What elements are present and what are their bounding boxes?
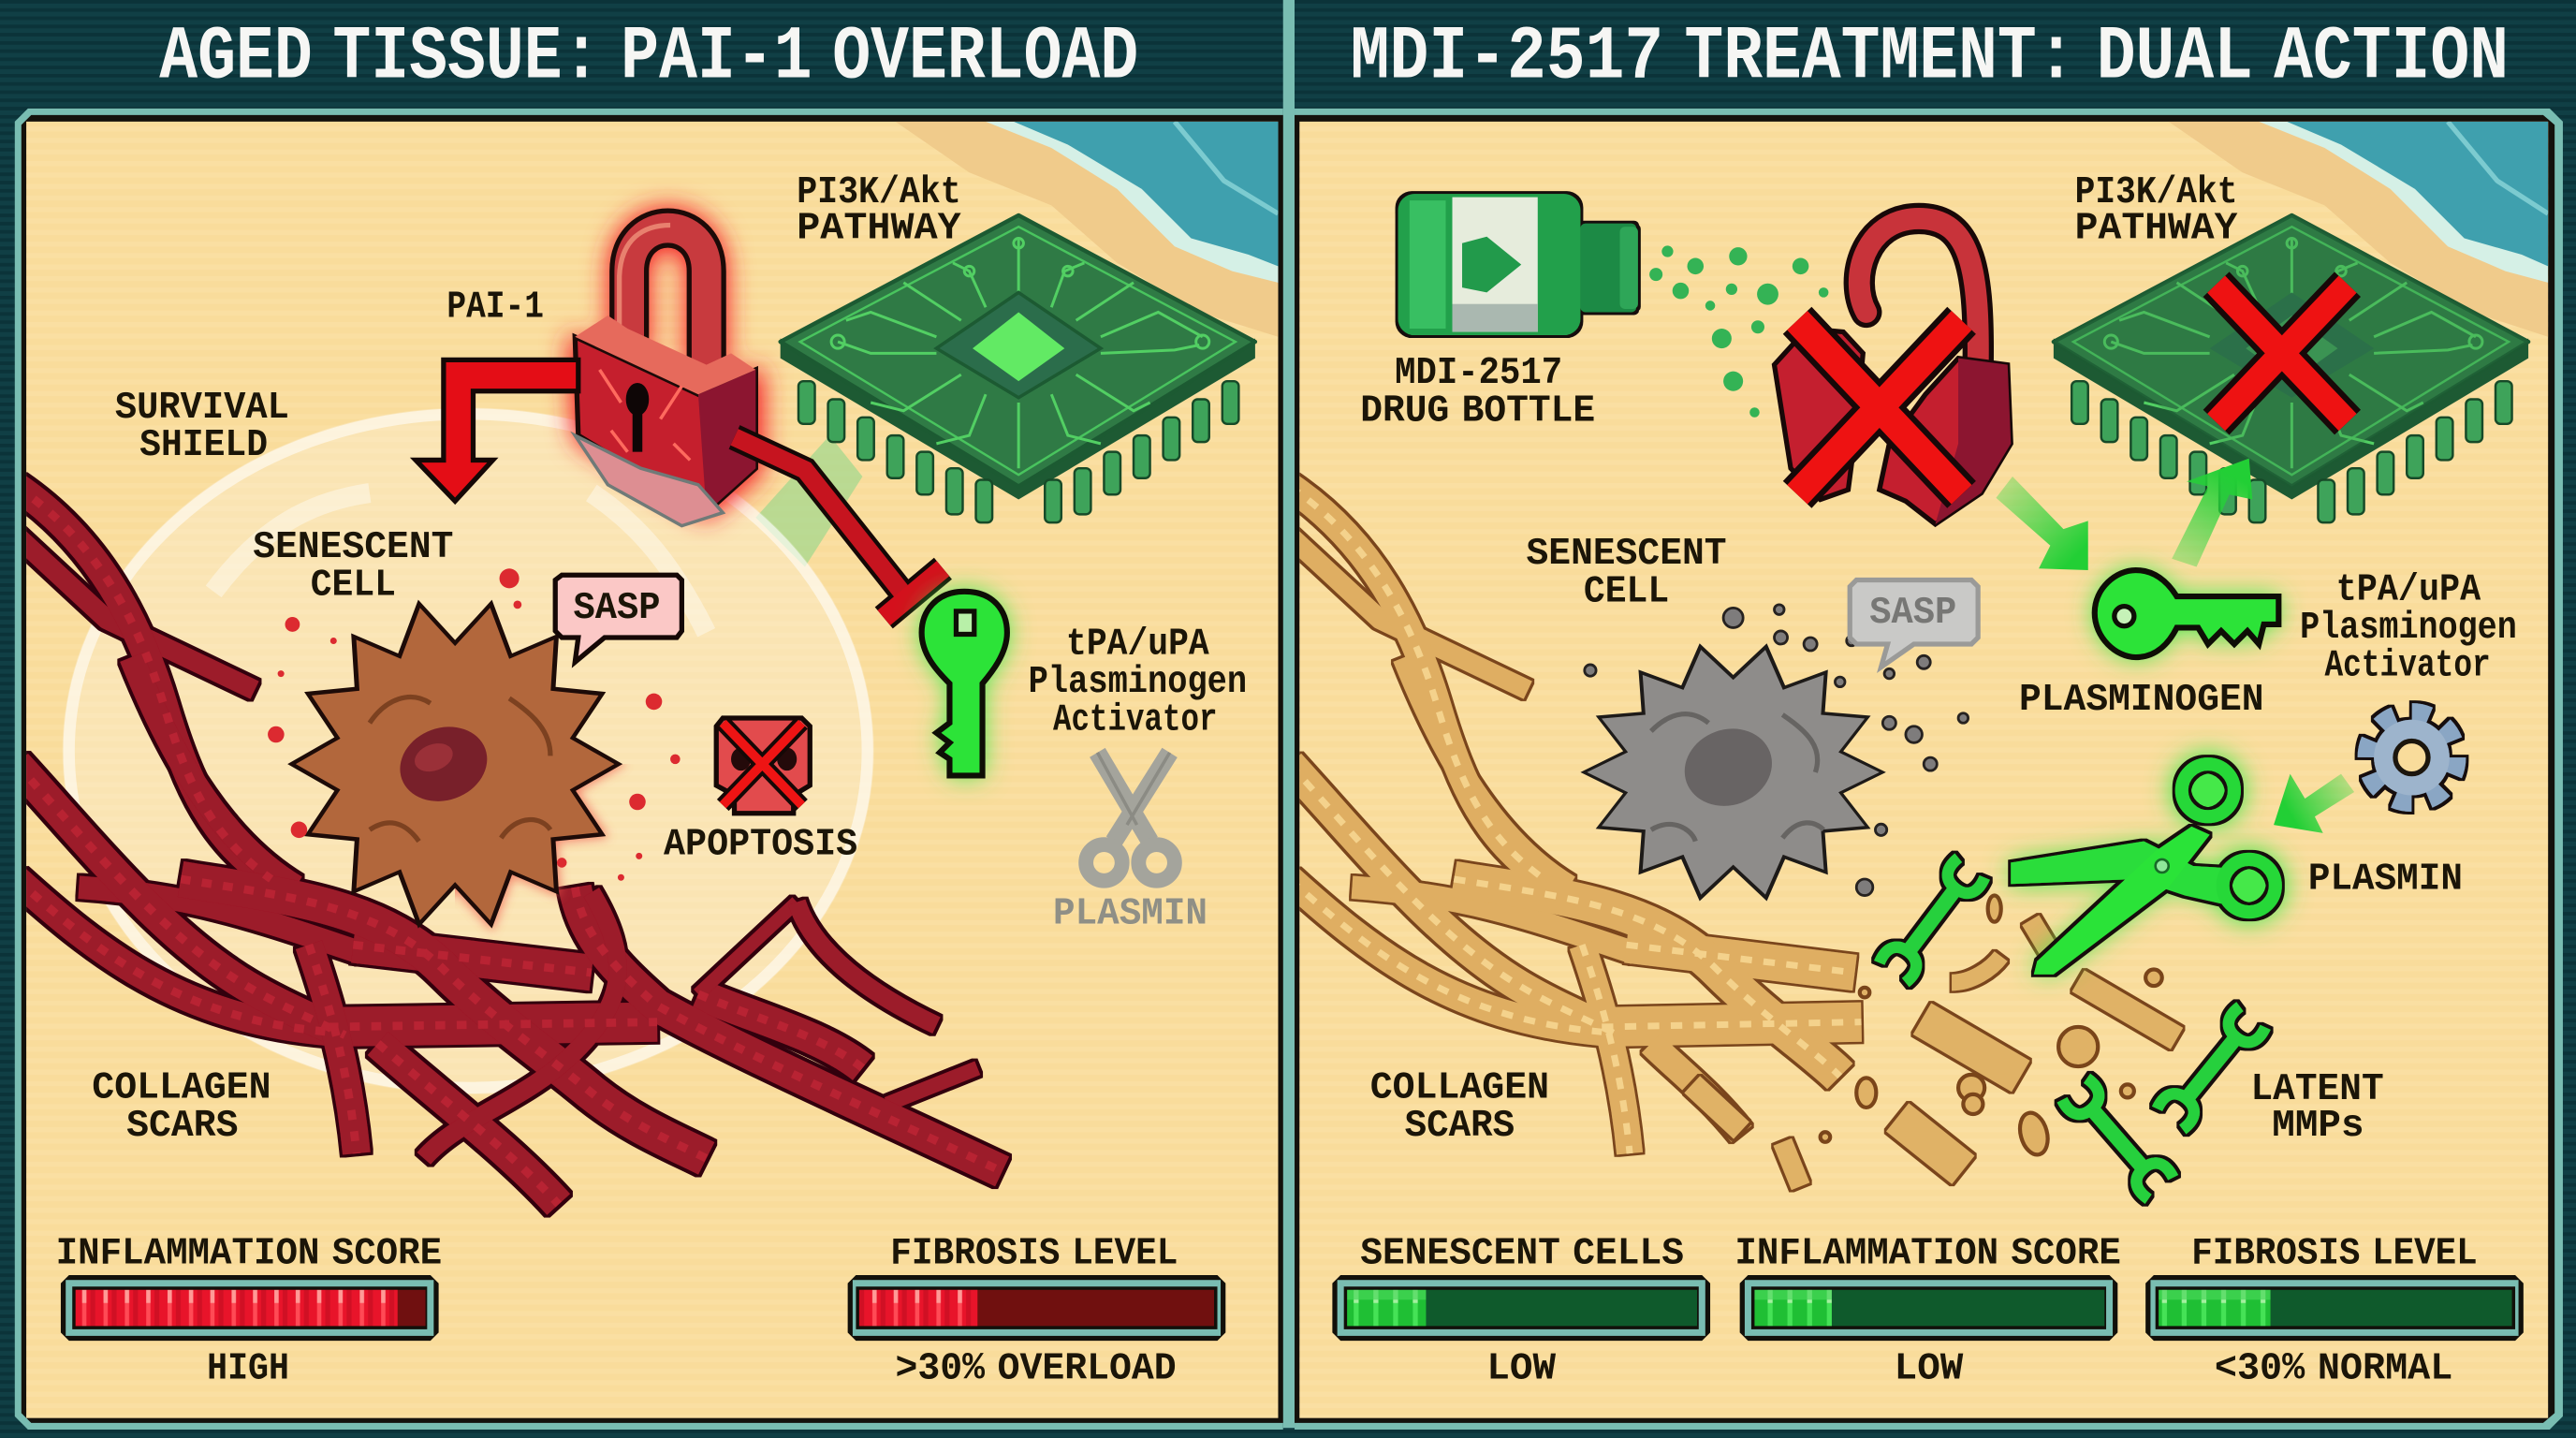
gauge: inflammation score right bbox=[1734, 1233, 2121, 1391]
beam between chip and key bbox=[755, 435, 862, 567]
icon: gray scissors plasmin inactive bbox=[1086, 753, 1175, 881]
label texts right: COLLAGEN bbox=[1370, 1066, 1549, 1109]
red X over chip bbox=[2217, 285, 2348, 422]
SASP speech bubble left bbox=[555, 575, 681, 662]
label texts left: tPA/uPA bbox=[1066, 624, 1209, 667]
icon: PI3K chip left bbox=[781, 215, 1255, 522]
gray debris bbox=[1585, 605, 1969, 896]
drug particles bbox=[1649, 245, 1828, 418]
icon: PI3K chip blocked bbox=[2054, 215, 2528, 522]
label texts left: PATHWAY bbox=[797, 207, 962, 250]
icon: active green scissors bbox=[2011, 755, 2285, 975]
gauge: inflammation score right: LOW bbox=[1895, 1348, 1964, 1391]
blood droplets bbox=[268, 568, 681, 881]
inhibition line to key bbox=[735, 437, 943, 618]
panel frame left bbox=[15, 109, 1283, 1430]
label texts right: SCARS bbox=[1405, 1105, 1515, 1148]
gauge: fibrosis level right bbox=[2145, 1233, 2524, 1391]
panel: MDI-2517 treatment bbox=[1290, 109, 2563, 1430]
arrow: gear to scissors bbox=[2274, 774, 2354, 833]
panel: aged tissue bbox=[15, 109, 1283, 1430]
arrow: lock to plasminogen bbox=[1996, 477, 2088, 570]
label texts right bbox=[1360, 171, 2517, 1148]
icon: plasmin gear bbox=[2367, 713, 2456, 801]
gauge: inflammation score left bbox=[56, 1233, 442, 1391]
label texts right: Activator bbox=[2324, 644, 2491, 687]
label texts left: Plasminogen bbox=[1029, 661, 1247, 704]
collagen scars dissolving bbox=[1290, 487, 1862, 1153]
gauge: senescent cells: LOW bbox=[1486, 1348, 1557, 1391]
survival shield bubble bbox=[63, 407, 874, 1094]
label texts left: PI3K/Akt bbox=[797, 171, 961, 214]
gauge: fibrosis level left bbox=[848, 1233, 1225, 1391]
label texts left: SHIELD bbox=[139, 424, 268, 467]
label texts right: PLASMINOGEN bbox=[2019, 679, 2264, 722]
label texts right: PI3K/Akt bbox=[2075, 171, 2237, 214]
SASP speech bubble left: SASP bbox=[574, 587, 661, 630]
SASP speech bubble gray: SASP bbox=[1869, 592, 1956, 635]
beach water corner right bbox=[2169, 122, 2548, 337]
arrow: PAI-1 to shield bbox=[416, 360, 578, 501]
label texts right: tPA/uPA bbox=[2336, 569, 2481, 612]
label texts left: APOPTOSIS bbox=[664, 824, 857, 867]
label texts left: SENESCENT bbox=[253, 526, 453, 569]
icon: plasminogen key bbox=[2095, 570, 2278, 657]
arrow: plasminogen to chip bbox=[2172, 459, 2252, 567]
center divider bbox=[1283, 0, 1295, 1428]
chip core left bbox=[936, 292, 1101, 398]
label texts left: CELL bbox=[311, 564, 396, 607]
senescent cell left bbox=[285, 596, 626, 932]
beach water corner left bbox=[896, 122, 1278, 337]
gauge: senescent cells bbox=[1332, 1233, 1710, 1391]
senescent cell gray bbox=[1580, 643, 1886, 902]
icon: PAI-1 lock left bbox=[568, 225, 762, 526]
label texts left: COLLAGEN bbox=[92, 1066, 271, 1109]
icon: MDI-2517 drug bottle bbox=[1398, 194, 1638, 335]
icon: tPA key left bbox=[922, 592, 1007, 775]
label texts right: MMPs bbox=[2272, 1105, 2364, 1148]
gauge: fibrosis level right: <30% NORMAL bbox=[2215, 1348, 2452, 1391]
gauge: inflammation score left: INFLAMMATION SCORE bbox=[56, 1233, 442, 1276]
label texts right: SENESCENT bbox=[1526, 533, 1727, 576]
label texts right: CELL bbox=[1584, 570, 1669, 613]
label texts left: SURVIVAL bbox=[115, 387, 289, 430]
SASP speech bubble gray bbox=[1850, 580, 1978, 668]
label texts left: PLASMIN bbox=[1053, 892, 1208, 935]
gauge: inflammation score right: INFLAMMATION SCORE bbox=[1734, 1233, 2121, 1276]
panel frame right bbox=[1295, 109, 2563, 1430]
label texts right: Plasminogen bbox=[2300, 607, 2517, 650]
gauge: fibrosis level right: FIBROSIS LEVEL bbox=[2191, 1233, 2478, 1276]
label texts left: SCARS bbox=[126, 1105, 238, 1148]
title left: AGED TISSUE: PAI-1 OVERLOAD bbox=[159, 15, 1138, 100]
icon: broken lock crossed bbox=[1775, 218, 2011, 524]
label texts left bbox=[92, 171, 1247, 1148]
gauge: fibrosis level left: FIBROSIS LEVEL bbox=[890, 1233, 1178, 1276]
label texts right: PATHWAY bbox=[2075, 207, 2238, 250]
label texts right: PLASMIN bbox=[2308, 858, 2463, 902]
gauge: senescent cells: SENESCENT CELLS bbox=[1360, 1233, 1684, 1276]
collagen fragments bbox=[1692, 896, 2177, 1186]
collagen scars left bbox=[17, 487, 1003, 1204]
gauge: fibrosis level left: >30% OVERLOAD bbox=[896, 1348, 1177, 1391]
label texts right: LATENT bbox=[2250, 1068, 2384, 1111]
gauge: inflammation score left: HIGH bbox=[207, 1348, 289, 1391]
label texts left: Activator bbox=[1053, 698, 1218, 741]
label texts right: MDI-2517 bbox=[1395, 352, 1562, 395]
label texts right: DRUG BOTTLE bbox=[1360, 389, 1595, 433]
icon: apoptosis skull crossed bbox=[716, 718, 810, 814]
label texts left: PAI-1 bbox=[446, 286, 544, 330]
chip core dimmed bbox=[2054, 215, 2528, 487]
icon: latent MMP wrenches bbox=[1879, 857, 2266, 1200]
